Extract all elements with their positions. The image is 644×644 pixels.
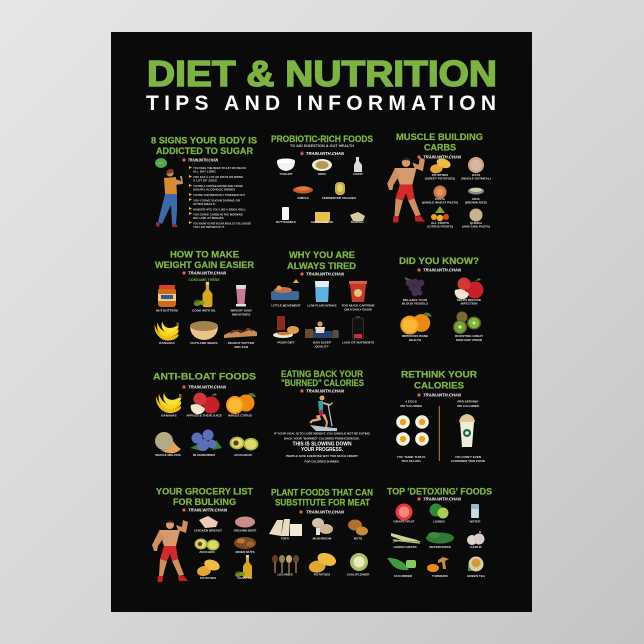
coffee drink comparison: PER SERVING bbox=[457, 400, 479, 404]
food: grapes: BLOOD VESSELS bbox=[402, 302, 428, 306]
heading: DID YOU KNOW? bbox=[399, 256, 479, 266]
food: oats bbox=[461, 157, 491, 180]
food: nut butter jar: NUT BUTTERS bbox=[156, 309, 178, 313]
food: blueberries: BLUEBERRIES bbox=[193, 453, 215, 457]
food: nuts: NUTS bbox=[354, 536, 362, 540]
heading: 8 SIGNS YOUR BODY IS bbox=[151, 135, 257, 145]
food: grapes: RELAXES YOUR bbox=[403, 298, 428, 302]
heading bbox=[156, 486, 253, 507]
food: yogurt: YOGURT bbox=[279, 172, 293, 176]
food: grapes bbox=[402, 277, 428, 306]
brand mark: TRAIN.WITH.CHAN bbox=[423, 392, 462, 398]
food: legumes on spoons: LEGUMES bbox=[277, 572, 293, 576]
food: all fruits: (CITRUS FRUITS) bbox=[427, 224, 453, 228]
heading: PROBIOTIC-RICH FOODS bbox=[271, 134, 373, 144]
food: water: WATER bbox=[470, 520, 481, 524]
icon: tired man on bed: QUALITY bbox=[315, 344, 330, 348]
list of signs: YOU CRAVE CARBS IN THE MORNING bbox=[193, 213, 244, 217]
brand mark: TRAIN.WITH.CHAN bbox=[188, 158, 219, 162]
eggs comparison: TOO FILLING bbox=[401, 459, 421, 463]
coffee drink comparison: 350 CALORIES bbox=[457, 404, 479, 408]
panel: eating back burned calories bbox=[274, 369, 371, 464]
food: quinoa bbox=[462, 208, 490, 228]
food: nuts and seeds: NUTS AND SEEDS bbox=[190, 341, 218, 345]
food: potatoes: POTATOES bbox=[432, 173, 448, 177]
brand mark: TRAIN.WITH.CHAN bbox=[306, 151, 345, 156]
icon: tired man on bed bbox=[305, 321, 339, 348]
food: turmeric: TURMERIC bbox=[432, 574, 449, 578]
brand mark: TRAIN.WITH.CHAN bbox=[423, 154, 462, 160]
title bbox=[146, 53, 497, 115]
icon: woman looking at phone bbox=[155, 158, 183, 227]
heading: ALWAYS TIRED bbox=[287, 261, 356, 271]
panel: grocery list for bulking bbox=[152, 486, 257, 582]
list of signs: A LOT OF JUICE bbox=[193, 179, 217, 183]
food: potatoes: POTATOES bbox=[314, 572, 330, 576]
food: garlic: GARLIC bbox=[470, 545, 483, 549]
brand mark: TRAIN.WITH.CHAN bbox=[306, 388, 345, 394]
food: fermented veggies: FERMENTED VEGGIES bbox=[322, 196, 356, 200]
food: pasta bbox=[422, 186, 458, 204]
food: peanut butter and jam toast bbox=[224, 328, 257, 349]
brand mark: TRAIN.WITH.CHAN bbox=[188, 270, 227, 276]
food: apples: APPLES & THEIR JUICE bbox=[186, 414, 222, 418]
heading bbox=[401, 370, 477, 390]
panel: did you know bbox=[399, 256, 484, 342]
heading bbox=[155, 250, 254, 270]
eggs comparison: 350 CALORIES bbox=[400, 404, 422, 408]
food: peanut butter and jam toast: AND JAM bbox=[234, 345, 248, 349]
explanatory text: IF YOUR GOAL IS TO LOSE WEIGHT, YOU SHOULD NOT BE EATING bbox=[274, 431, 371, 435]
heading: "BURNED" CALORIES bbox=[281, 378, 364, 388]
food: watercress: WATERCRESS bbox=[429, 545, 451, 549]
food: lemon: LEMON bbox=[433, 520, 445, 524]
poster panel bbox=[111, 32, 532, 612]
panel: weight gain easier bbox=[155, 250, 257, 349]
food: buttermilk: BUTTERMILK bbox=[276, 220, 297, 224]
panel: rethink your calories bbox=[396, 370, 486, 463]
list of signs: YOU FEEL THE NEED TO EAT OR SNACK bbox=[193, 166, 247, 170]
heading: WHY YOU ARE bbox=[289, 250, 355, 260]
food: ground beef: GROUND BEEF bbox=[234, 529, 257, 533]
food: potatoes bbox=[425, 157, 455, 180]
icon: coffee cup: ON A DAILY BASIS bbox=[344, 308, 372, 312]
icon: person on treadmill bbox=[309, 396, 337, 431]
heading: EATING BACK YOUR bbox=[281, 369, 363, 379]
heading: TO AID DIGESTION & GUT HEALTH bbox=[290, 144, 355, 148]
food: oranges: HEALTH bbox=[409, 338, 422, 342]
heading: WEIGHT GAIN EASIER bbox=[155, 260, 254, 270]
list of signs: YOU GO WITHOUT IT bbox=[193, 225, 224, 229]
food: kiwi bbox=[453, 312, 483, 342]
heading: TOP 'DETOXING' FOODS bbox=[387, 487, 492, 497]
brand mark: TRAIN.WITH.CHAN bbox=[188, 384, 227, 390]
food: quinoa: (AND CHIA PASTA) bbox=[462, 224, 490, 228]
list of signs: OR LATE AT NIGHTS bbox=[193, 216, 224, 220]
food: rice: RICE bbox=[472, 197, 480, 201]
sub-heading: CONSUME THESE bbox=[188, 278, 220, 282]
list of signs: YOU'RE A COFFEE HOUND AND CRAVE bbox=[193, 184, 243, 188]
explanatory text: THIS IS SLOWING DOWN bbox=[292, 442, 352, 448]
list of signs: HUNGER HITS YOU LIKE A BRICK WALL bbox=[193, 207, 246, 211]
heading: ADDICTED TO SUGAR bbox=[156, 146, 253, 156]
heading: CALORIES bbox=[414, 380, 464, 390]
list of signs: ALL DAY LONG bbox=[193, 170, 216, 174]
panel: why you are tired bbox=[271, 250, 375, 348]
food: tofu: TOFU bbox=[281, 536, 290, 540]
heading: FOR BULKING bbox=[173, 497, 236, 507]
food: peanut butter and jam toast: PEANUT BUTTER bbox=[228, 341, 255, 345]
explanatory text bbox=[274, 431, 371, 464]
icon: glass of water: LOW FLUID INTAKE bbox=[307, 304, 337, 308]
food: kimchi: KIMCHI bbox=[298, 196, 309, 200]
brand mark: TRAIN.WITH.CHAN bbox=[306, 510, 345, 514]
food: rice: (BROWN RICE) bbox=[465, 200, 487, 204]
food: lemon grass: LEMON GRASS bbox=[393, 545, 417, 549]
heading: CARBS bbox=[424, 142, 456, 152]
eggs comparison bbox=[396, 400, 429, 463]
divider bbox=[439, 406, 440, 461]
food: pasta: PASTA bbox=[435, 197, 446, 201]
heading bbox=[271, 134, 373, 148]
food: potatoes: POTATOES bbox=[200, 576, 216, 580]
brand mark: TRAIN.WITH.CHAN bbox=[306, 272, 345, 276]
heading: PLANT FOODS THAT CAN bbox=[271, 487, 373, 497]
food: kiwi: SKIN AND VISION bbox=[456, 338, 483, 342]
icon: low battery: LACK OF NUTRIENTS bbox=[342, 341, 374, 345]
food: cooking oil: COOK WITH OIL bbox=[192, 309, 216, 313]
food: mixed nuts: MIXED NUTS bbox=[235, 550, 255, 554]
food: green tea: GREEN TEA bbox=[467, 574, 486, 578]
list of signs bbox=[189, 166, 252, 229]
food: citrus: WHOLE CITRUS bbox=[228, 414, 252, 418]
list of signs: AFTER MEALS bbox=[193, 202, 215, 206]
food: mushrooms: MUSHROOM bbox=[313, 536, 332, 540]
brand mark: TRAIN.WITH.CHAN bbox=[423, 496, 462, 502]
food: quinoa: QUINOA bbox=[470, 221, 483, 225]
figure: bodybuilder bbox=[387, 157, 425, 223]
food: cauliflower: CAULIFLOWER bbox=[347, 572, 370, 576]
list of signs: YOU EAT A LOT OF FRUIT OR DRINK bbox=[193, 175, 244, 179]
food: oranges: IMPROVES BONE bbox=[402, 334, 428, 338]
icon: coffee cup: TOO MUCH CAFFEINE bbox=[341, 304, 375, 308]
food: avocado: AVOCADO bbox=[199, 550, 215, 554]
food: apples bbox=[455, 278, 484, 306]
food: avocados: AVOCADOS bbox=[234, 453, 252, 457]
list of signs: YOU KNOW YOU'RE SUGAR INDULGE THE LONGER bbox=[193, 221, 252, 225]
explanatory text: PEOPLE GIVE EXERCISE WAY TOO MUCH CREDIT bbox=[286, 454, 358, 458]
heading bbox=[396, 132, 483, 152]
heading: HOW TO MAKE bbox=[170, 250, 239, 260]
title: TIPS AND INFORMATION bbox=[146, 92, 496, 115]
heading bbox=[151, 135, 257, 156]
food: aged cheese: AGED CHEESE bbox=[311, 220, 333, 224]
food: melon: WHOLE MELONS bbox=[155, 453, 181, 457]
coffee drink comparison: YOU DON'T EVEN bbox=[455, 455, 482, 459]
eggs comparison: 4 EGGS bbox=[405, 400, 417, 404]
food: oats: OATS bbox=[472, 173, 480, 177]
list of signs: YOU CRAVE SUGAR DURING OR bbox=[193, 198, 241, 202]
food: bananas: BANANAS bbox=[161, 414, 177, 418]
title: DIET & NUTRITION bbox=[147, 53, 497, 94]
panel: signs of sugar addiction bbox=[151, 135, 257, 229]
food: olive oil: OLIVE OIL bbox=[237, 576, 253, 580]
food: tempeh: TEMPEH bbox=[351, 220, 364, 224]
food: oats: (WHOLE OATMEAL) bbox=[461, 176, 491, 180]
food: cucumber: CUCUMBER bbox=[394, 574, 413, 578]
food: chicken breast: CHICKEN BREAST bbox=[194, 529, 222, 533]
food: kiwi: BOOSTING GREAT bbox=[455, 334, 483, 338]
heading: MUSCLE BUILDING bbox=[396, 132, 483, 142]
explanatory text: FOR CALORIES BURNED. bbox=[304, 460, 340, 464]
panel: plant foods substitute for meat bbox=[269, 487, 373, 576]
food: kefir: KEFIR bbox=[353, 172, 363, 176]
food: rice bbox=[465, 188, 487, 204]
brand mark: TRAIN.WITH.CHAN bbox=[188, 508, 228, 512]
food: smoothie: WEIGHT GAIN bbox=[231, 309, 252, 313]
heading: YOUR GROCERY LIST bbox=[156, 486, 253, 496]
figure: bodybuilder bbox=[152, 520, 188, 582]
panel: top detoxing foods bbox=[387, 487, 492, 578]
coffee drink comparison bbox=[451, 400, 486, 463]
heading bbox=[271, 487, 373, 508]
food: grapefruit: GRAPE FRUIT bbox=[394, 520, 415, 524]
explanatory text: BACK YOUR "BURNED" CALORIES FROM EXERCISE. bbox=[284, 437, 360, 441]
list of signs: SUGARY, ALCOHOLIC DRINKS bbox=[193, 188, 235, 192]
heading: SUBSTITUTE FOR MEAT bbox=[275, 498, 370, 508]
icon: coffee cup bbox=[341, 281, 375, 312]
food: smoothie bbox=[231, 285, 252, 316]
coffee drink comparison: CONSIDER THIS FOOD bbox=[451, 459, 486, 463]
food: all fruits: ALL FRUITS bbox=[431, 221, 449, 225]
food: bananas: BANANAS bbox=[159, 341, 175, 345]
food: all fruits bbox=[427, 206, 453, 228]
icon: fast food: POOR DIET bbox=[277, 341, 295, 345]
food: oranges bbox=[400, 312, 432, 342]
panel: probiotic-rich foods bbox=[271, 134, 373, 224]
heading bbox=[281, 369, 364, 388]
heading: RETHINK YOUR bbox=[401, 370, 477, 380]
explanatory text: YOUR PROGRESS. bbox=[301, 447, 343, 453]
food: apples: HELPS REDUCE bbox=[457, 298, 481, 302]
food: potatoes: (SWEET POTATOES) bbox=[425, 176, 455, 180]
brand mark: TRAIN.WITH.CHAN bbox=[423, 268, 462, 272]
panel: anti-bloat foods bbox=[153, 372, 258, 457]
icon: person on couch: LITTLE MOVEMENT bbox=[271, 304, 301, 308]
food: smoothie: SMOOTHIES bbox=[232, 312, 250, 316]
eggs comparison: YOU THINK THIS IS bbox=[397, 455, 425, 459]
icon: tired man on bed: BAD SLEEP bbox=[313, 341, 331, 345]
heading bbox=[287, 250, 356, 271]
food: apples: INFECTION bbox=[461, 302, 478, 306]
list of signs: YOU'RE CONTINUOUSLY STRESSED OUT bbox=[193, 193, 245, 197]
food: miso: MISO bbox=[318, 172, 327, 176]
panel: muscle building carbs bbox=[387, 132, 491, 228]
food: pasta: (WHOLE WHEAT PASTA) bbox=[422, 200, 458, 204]
heading: ANTI-BLOAT FOODS bbox=[153, 372, 256, 382]
